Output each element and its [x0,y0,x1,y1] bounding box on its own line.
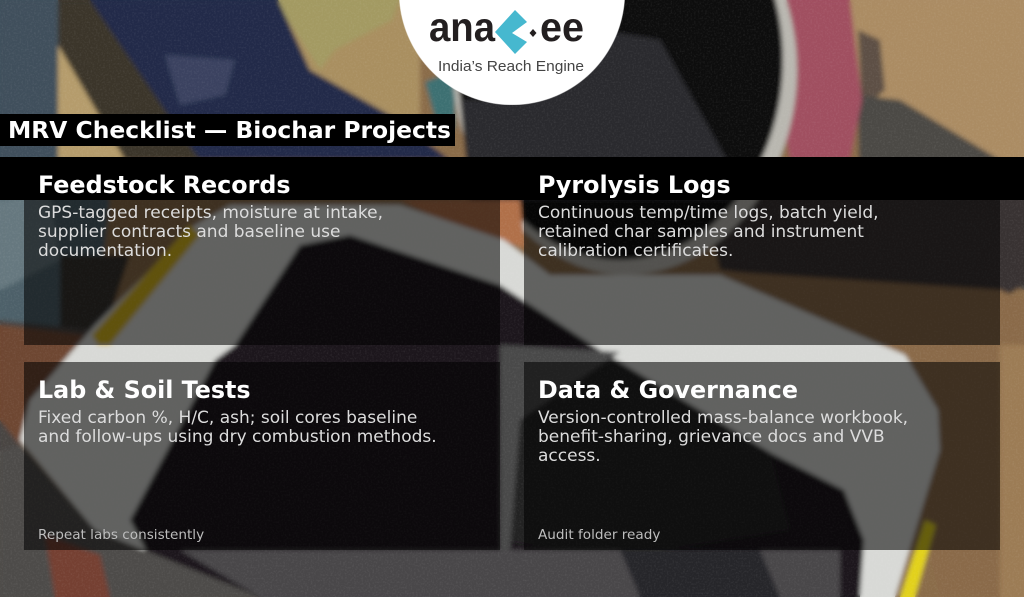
footnote: Repeat labs consistently [38,527,204,543]
panel: data and governance [524,362,1000,550]
panel: lab and soil tests [24,362,500,550]
header band [0,157,1024,200]
heading: Data & Governance [538,376,798,404]
icon: teal diamond mark [495,10,527,54]
body text: retained char samples and instrument [538,222,864,242]
body text [38,408,437,447]
footnote: Audit folder ready [538,527,660,543]
panel: pyrolysis logs [524,157,1000,345]
logo: anaxee India's Reach Engine [429,5,584,75]
body text: Version-controlled mass-balance workbook, [538,408,908,428]
body text: Fixed carbon %, H/C, ash; soil cores baseline [38,408,417,428]
tagline: India’s Reach Engine [438,58,584,75]
heading: Pyrolysis Logs [538,171,731,199]
body text [38,203,383,261]
body text: and follow-ups using dry combustion methods. [38,427,437,447]
body text: GPS-tagged receipts, moisture at intake, [38,203,383,223]
body text: access. [538,446,601,466]
body text: Continuous temp/time logs, batch yield, [538,203,879,223]
title: MRV Checklist — Biochar Projects [8,116,451,144]
heading: Lab & Soil Tests [38,376,251,404]
body text: supplier contracts and baseline use [38,222,340,242]
panel: feedstock records [24,157,500,345]
body text: documentation. [38,241,172,261]
logo badge [399,0,625,105]
body text: benefit-sharing, grievance docs and VVB [538,427,885,447]
body text: calibration certificates. [538,241,733,261]
body text [538,203,879,261]
dot [530,29,536,37]
body text [538,408,908,466]
heading: Feedstock Records [38,171,291,199]
